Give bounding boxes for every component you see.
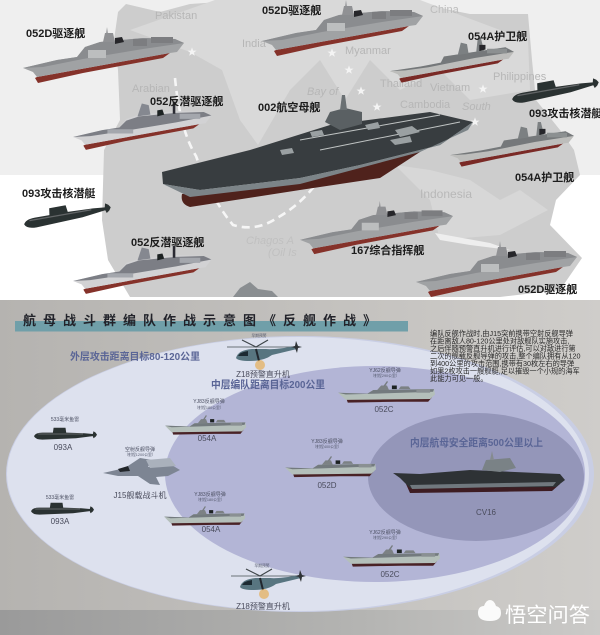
helicopter: Z18 bottom: Z18预警直升机 bbox=[236, 601, 290, 611]
label: 052D top centre: 052D驱逐舰 bbox=[262, 3, 321, 17]
label: 167: 167综合指挥舰 bbox=[351, 243, 424, 257]
ship: 052C lower: （射程290公里） bbox=[370, 535, 400, 540]
outer zone bbox=[6, 336, 594, 612]
helicopter: Z18 top: 早期预警 bbox=[251, 333, 267, 338]
watermark: 悟空问答 bbox=[505, 604, 590, 627]
label: 052 anti-submarine upper: 052反潜驱逐舰 bbox=[150, 94, 223, 108]
map place names: Pakistan bbox=[155, 10, 197, 22]
description text: 在距离敌人80-120公里处对敌舰队实施攻击, bbox=[430, 336, 569, 346]
carrier: 002 bbox=[162, 95, 473, 207]
ship: 054A upper bbox=[390, 38, 514, 83]
submarine: 093A lower: 533毫米鱼雷 bbox=[46, 494, 74, 501]
stars bbox=[188, 47, 488, 126]
ship: 052C upper: 052C bbox=[374, 405, 394, 414]
carrier: CV16 bbox=[393, 451, 565, 517]
description text: 到400公里的攻击范围,携带有30枚左右的导弹 bbox=[430, 359, 574, 368]
helicopter: Z18 top: Z18预警直升机 bbox=[236, 369, 290, 379]
map place names: Thailand bbox=[380, 78, 422, 90]
ship: 052D centre: （射程400公里） bbox=[312, 444, 342, 449]
ship: 052C lower: 052C bbox=[380, 570, 400, 579]
map place names: India bbox=[242, 38, 267, 50]
watermark bbox=[478, 600, 590, 627]
ship: 054A upper: （射程180公里） bbox=[194, 405, 224, 410]
ship: 052D top centre bbox=[262, 0, 423, 56]
fighter: J15 bbox=[103, 446, 180, 500]
map place names: Arabian bbox=[132, 83, 170, 95]
description text: 之后伴随预警直升机进行评估,可以对敌进行第 bbox=[430, 344, 576, 353]
submarine: 093 right bbox=[510, 73, 600, 104]
label: 054A lower: 054A护卫舰 bbox=[515, 170, 574, 184]
ship: 052C lower: YJ62反舰导弹 bbox=[369, 529, 401, 536]
ship: 054A lower bbox=[450, 122, 574, 167]
map place names: Bay of bbox=[307, 86, 339, 98]
ship: 052D centre: 052D bbox=[317, 481, 337, 490]
description text bbox=[430, 329, 581, 383]
ship: 052D centre: YJ83反舰导弹 bbox=[311, 438, 343, 445]
inner zone bbox=[368, 413, 584, 541]
ship: 054A lower: YJ83反舰导弹 bbox=[194, 491, 226, 498]
ship: 054A upper: YJ83反舰导弹 bbox=[193, 398, 225, 405]
map place names: Vietnam bbox=[430, 82, 470, 94]
helicopter: Z18 top bbox=[227, 333, 302, 379]
map background bbox=[0, 0, 600, 297]
title bar bbox=[15, 321, 408, 332]
ship: 054A upper bbox=[165, 398, 246, 443]
description text: 编队反舰作战时,由J15突前携带空射反舰导弹 bbox=[430, 329, 573, 338]
map place names: Chagos A bbox=[246, 235, 294, 247]
map place names: (Oil Is bbox=[268, 247, 297, 259]
panel: carrier group map bbox=[0, 0, 600, 297]
ship: 054A lower: （射程180公里） bbox=[195, 497, 225, 502]
partial ship at crop edge bbox=[233, 282, 278, 297]
dashed patrol circle bbox=[175, 78, 316, 227]
middle range heading: 中层编队距离目标200公里 bbox=[211, 378, 325, 391]
submarine: 093A lower bbox=[31, 494, 94, 526]
ship: 054A lower bbox=[164, 491, 245, 534]
submarine: 093A upper: 093A bbox=[54, 443, 73, 452]
map place names: Philippines bbox=[493, 71, 547, 83]
fighter: J15: （射程1200公里） bbox=[124, 452, 156, 457]
map place names: Myanmar bbox=[345, 45, 391, 57]
inner range heading: 内层航母安全距离500公里以上 bbox=[410, 436, 543, 449]
ship: 054A upper: 054A bbox=[198, 434, 217, 443]
helicopter: Z18 bottom: 早期预警 bbox=[254, 563, 270, 568]
submarine: 093A upper: 533毫米鱼雷 bbox=[51, 416, 79, 423]
ship: 052 anti-submarine lower bbox=[73, 246, 211, 294]
fighter: J15: J15舰载战斗机 bbox=[114, 490, 166, 500]
ship: 052C upper bbox=[338, 367, 435, 414]
label: 052D top left: 052D驱逐舰 bbox=[26, 26, 85, 40]
ship: 052C lower bbox=[343, 529, 440, 579]
ship: 054A lower: 054A bbox=[202, 525, 221, 534]
description text: 如果2枚攻击一艘舰艇,足以摧毁一个小规的海军 bbox=[430, 366, 580, 376]
fighter: J15: 空射反舰导弹 bbox=[125, 446, 155, 453]
label: 052D lower right: 052D驱逐舰 bbox=[518, 282, 577, 296]
helicopter: Z18 bottom bbox=[231, 563, 306, 611]
ship: 052C upper: （射程290公里） bbox=[370, 373, 400, 378]
title: 航母战斗群编队作战示意图《反舰作战》 bbox=[23, 313, 383, 328]
diagram background bbox=[0, 300, 600, 635]
ship: 052D centre bbox=[285, 438, 376, 490]
description text: 二次的舰载反舰导弹的攻击,整个编队拥有从120 bbox=[430, 352, 581, 360]
panel: formation diagram bbox=[0, 300, 600, 635]
ship: 052D lower right bbox=[416, 241, 577, 297]
submarine: 093 left bbox=[22, 198, 112, 229]
middle zone bbox=[165, 366, 585, 582]
carrier: CV16: CV16 bbox=[476, 508, 497, 517]
label: 093 left: 093攻击核潜艇 bbox=[22, 186, 95, 200]
label: 054A upper: 054A护卫舰 bbox=[468, 29, 527, 43]
map place names bbox=[132, 4, 547, 259]
map place names: Cambodia bbox=[400, 99, 451, 111]
ship: 167 bbox=[300, 201, 453, 254]
outer range heading: 外层攻击距离目标80-120公里 bbox=[70, 350, 200, 363]
ship: 052C upper: YJ62反舰导弹 bbox=[369, 367, 401, 374]
map place names: China bbox=[430, 4, 460, 16]
map place names: Indonesia bbox=[420, 187, 472, 201]
label: 052 anti-submarine lower: 052反潜驱逐舰 bbox=[131, 235, 204, 249]
label: 002 carrier: 002航空母舰 bbox=[258, 100, 320, 114]
map place names: South bbox=[462, 101, 491, 113]
description text: 此能力可见一般。 bbox=[430, 374, 488, 383]
submarine: 093A lower: 093A bbox=[51, 517, 70, 526]
ship: 052D top left bbox=[23, 27, 184, 83]
ship: 052 anti-submarine upper bbox=[73, 102, 211, 150]
submarine: 093A upper bbox=[34, 416, 97, 452]
